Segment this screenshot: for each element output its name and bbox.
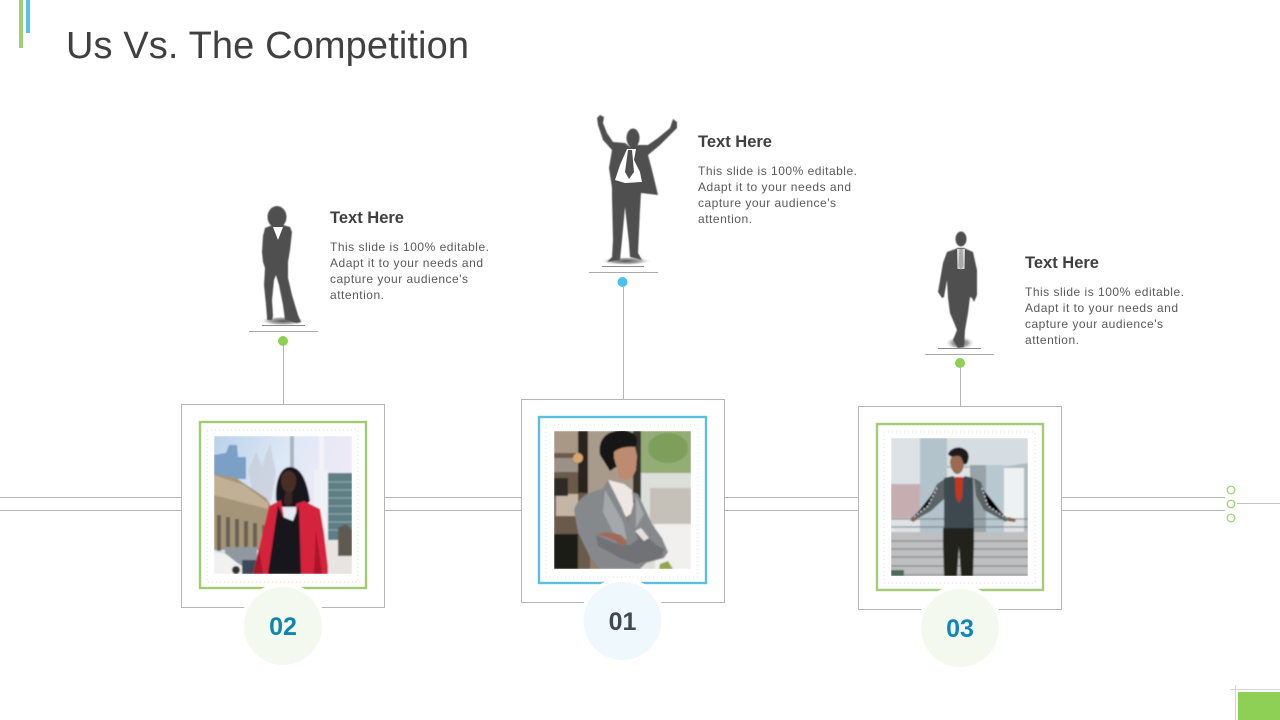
platform with dot: [925, 354, 994, 406]
title: Us Vs. The Competition: [66, 25, 469, 67]
panel: competitor 03: [858, 232, 1184, 671]
text block: capture your audience's: [1025, 317, 1163, 331]
text block: [330, 209, 489, 302]
badge 03: [917, 585, 1003, 671]
badge 03: 03: [946, 615, 974, 643]
text block: Adapt it to your needs and: [698, 180, 851, 194]
text block: [698, 133, 857, 226]
platform with dot: [249, 332, 318, 404]
photo: man in grey blazer: [554, 431, 691, 569]
text block: capture your audience's: [698, 196, 836, 210]
text block: Text Here: [698, 133, 772, 151]
accent bars: [19, 0, 30, 48]
text block: This slide is 100% editable.: [1025, 285, 1184, 299]
silhouette: woman standing: [259, 206, 307, 326]
text block: attention.: [698, 212, 752, 226]
photo frame: [522, 400, 724, 602]
panel: competitor 02: [182, 206, 489, 669]
badge 02: [240, 583, 326, 669]
end markers: [1227, 486, 1235, 522]
badge 01: [580, 578, 666, 664]
text block: Text Here: [330, 209, 404, 227]
text block: Adapt it to your needs and: [330, 256, 483, 270]
text block: attention.: [1025, 333, 1079, 347]
photo frame: [182, 404, 384, 608]
silhouette: man walking: [938, 232, 981, 350]
text block: [1025, 254, 1184, 347]
text block: Text Here: [1025, 254, 1099, 272]
photo frame: [858, 406, 1062, 610]
text block: This slide is 100% editable.: [330, 240, 489, 254]
photo: man on balcony: [891, 438, 1028, 576]
photo: woman in red jacket: [214, 436, 352, 574]
text block: This slide is 100% editable.: [698, 164, 857, 178]
badge 02: 02: [269, 613, 297, 641]
silhouette: man arms raised: [597, 115, 677, 266]
panel: competitor 01: [522, 115, 857, 664]
text block: attention.: [330, 288, 384, 302]
corner accent: [1230, 685, 1280, 720]
text block: capture your audience's: [330, 272, 468, 286]
timeline lines: [0, 498, 1280, 510]
platform with dot: [589, 272, 658, 399]
text block: Adapt it to your needs and: [1025, 301, 1178, 315]
badge 01: 01: [609, 608, 636, 636]
